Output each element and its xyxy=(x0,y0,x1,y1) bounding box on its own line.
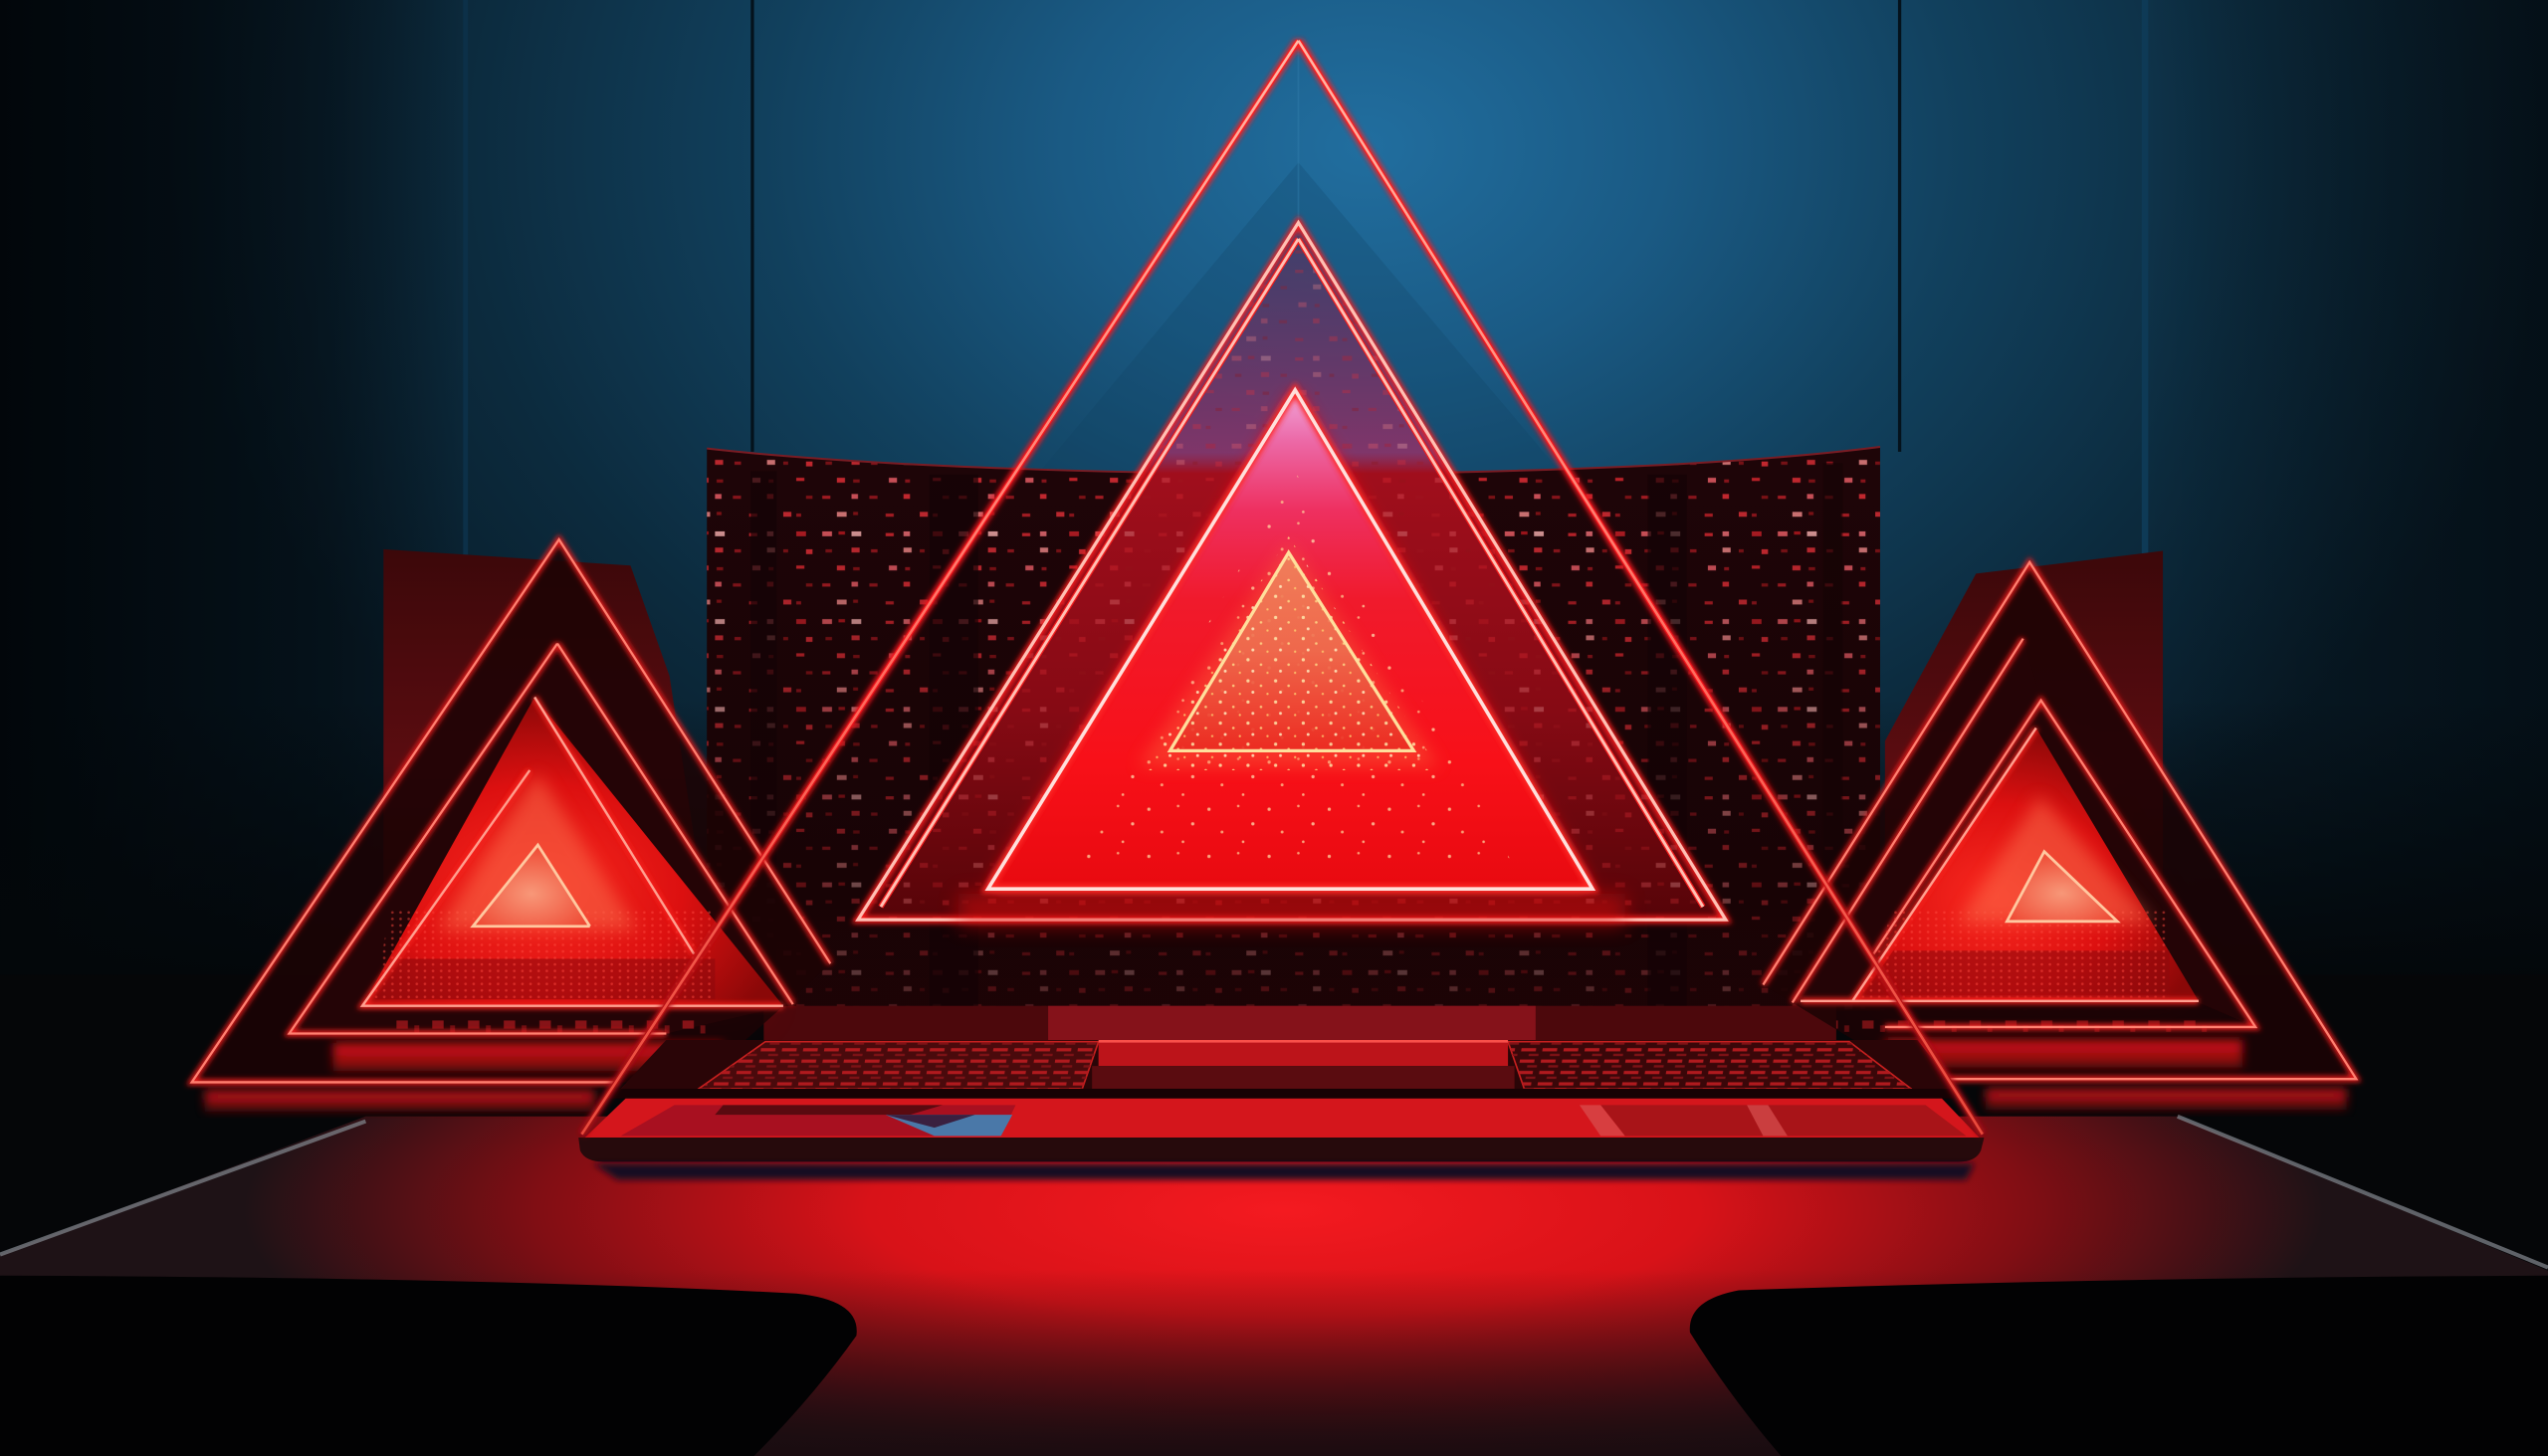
inner red triangle xyxy=(988,390,1592,889)
wall centre fold chevrons xyxy=(1040,49,1560,472)
floor glow left xyxy=(205,1091,595,1112)
palm rest screen reflection right xyxy=(1580,1105,1967,1136)
right keyboard xyxy=(1508,1042,1911,1089)
left shelf xyxy=(333,1043,724,1071)
table surface xyxy=(0,1117,2548,1456)
laptop shadow xyxy=(593,1163,1975,1179)
central server wall panel xyxy=(707,447,1880,1011)
glow below central triangle xyxy=(958,894,1625,927)
palm rest screen reflection left xyxy=(621,1105,1015,1136)
laptop palm rest xyxy=(585,1099,1980,1138)
left middle triangle xyxy=(290,644,793,1033)
laptop front edge xyxy=(578,1138,1984,1161)
right back panel xyxy=(1885,551,2163,975)
large outer triangle xyxy=(581,41,1983,1135)
centre hinge panel xyxy=(1092,1040,1515,1089)
right inner red triangle xyxy=(1801,728,2199,1001)
left triangle group xyxy=(192,539,830,1082)
right outer triangle xyxy=(1763,562,2356,1079)
laptop base xyxy=(578,1040,1984,1179)
left inner red triangle xyxy=(362,697,783,1006)
floor glow right xyxy=(1986,1089,2347,1110)
left outer triangle xyxy=(192,539,830,1082)
right ambient glow xyxy=(1869,728,2199,1002)
floor band behind objects xyxy=(0,975,2548,1284)
right glowing core xyxy=(1958,796,2153,923)
right shelf xyxy=(1885,1040,2242,1068)
table black cutout right xyxy=(1690,1276,2548,1456)
left ambient glow xyxy=(365,731,763,1007)
left back panel xyxy=(383,549,715,975)
middle triangle xyxy=(858,223,1726,920)
laptop deck back xyxy=(617,1040,1958,1092)
left glowing core xyxy=(439,773,637,930)
laptop gap xyxy=(604,1089,1953,1099)
table black cutout left xyxy=(0,1276,857,1456)
right middle triangle xyxy=(1793,639,2255,1032)
glowing core triangle xyxy=(1138,536,1440,770)
lower server wall strip xyxy=(763,1006,1836,1042)
left keyboard xyxy=(699,1042,1099,1089)
right triangle group xyxy=(1763,562,2356,1079)
